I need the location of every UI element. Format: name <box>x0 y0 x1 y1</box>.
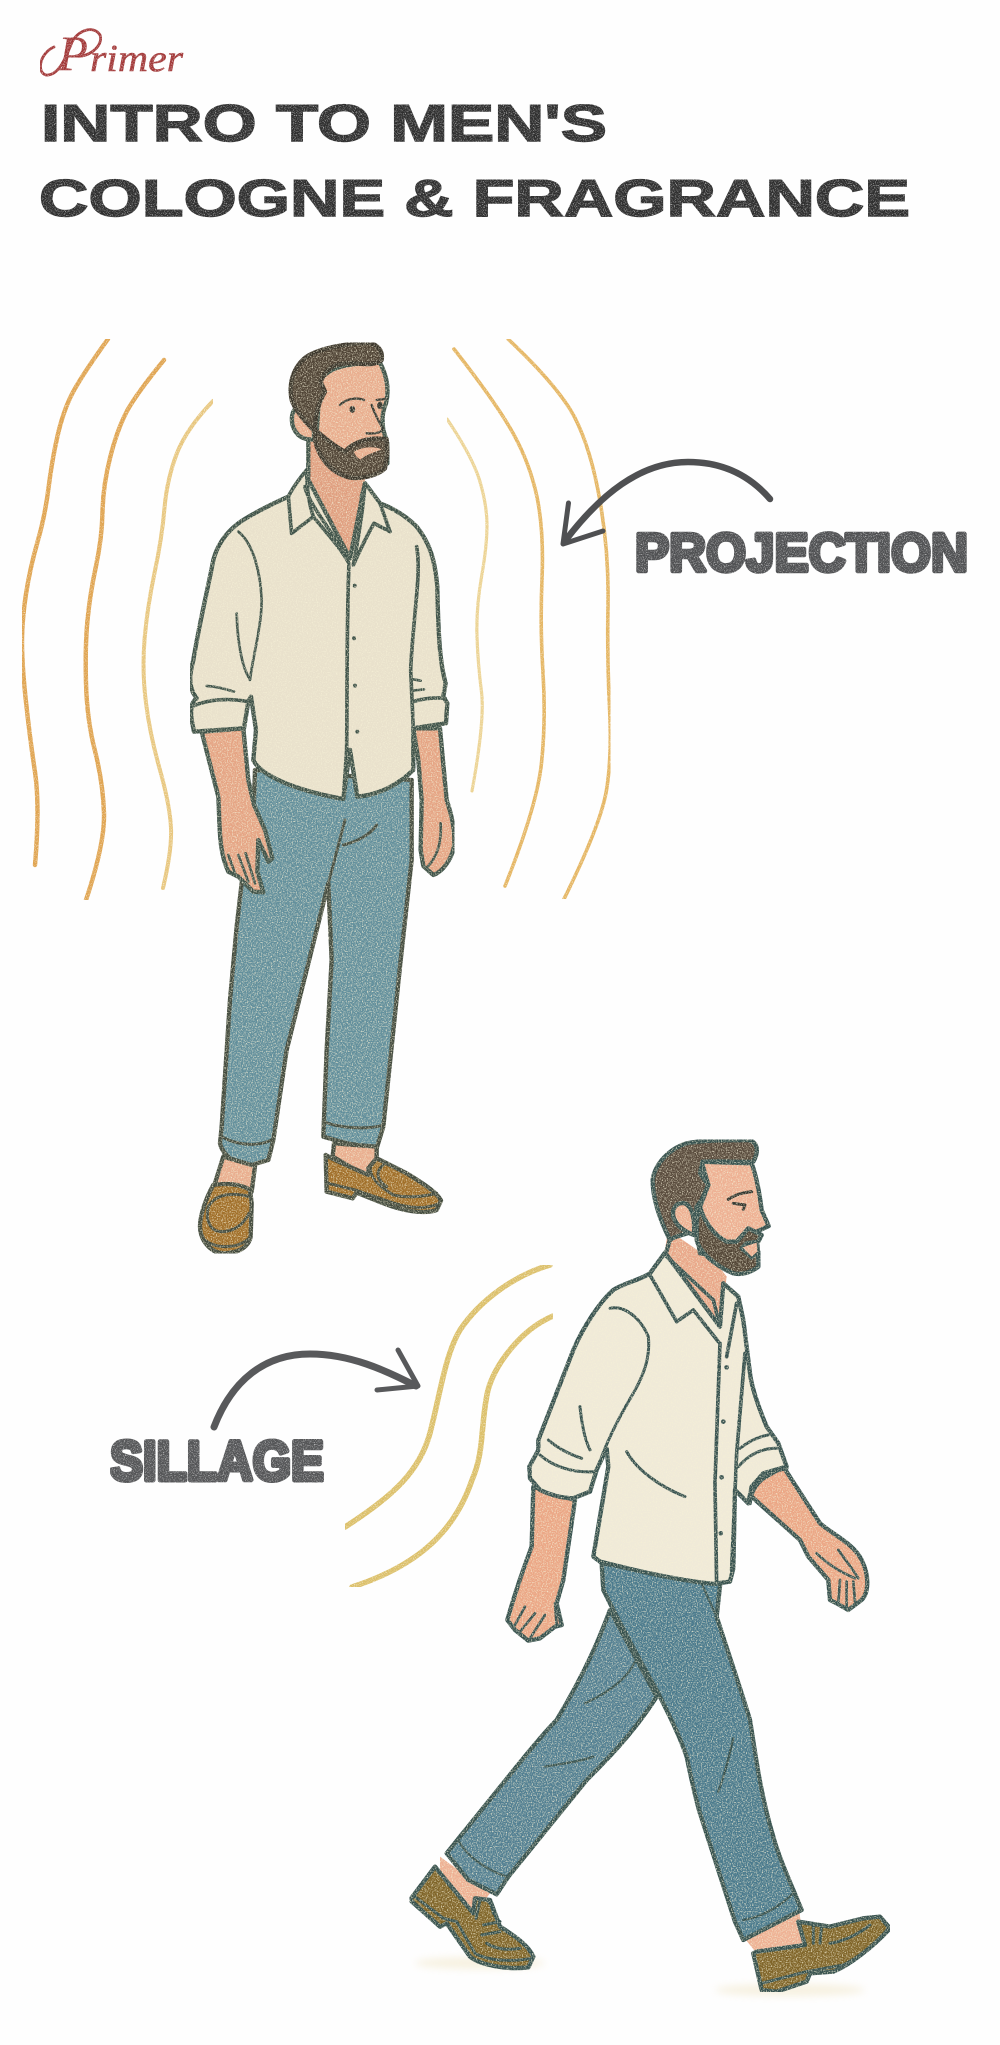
arrow: sillage <box>214 1350 418 1427</box>
foot: right <box>333 1143 377 1177</box>
foot: front <box>743 1907 805 1953</box>
shoe: right <box>326 1155 441 1212</box>
shirt <box>190 477 447 799</box>
shoe: left <box>200 1184 252 1253</box>
mouth <box>354 447 382 459</box>
lower body: legs and shoes <box>410 1487 890 1992</box>
logo: Primer <box>40 25 183 81</box>
neck <box>664 1230 727 1327</box>
face <box>695 1162 769 1260</box>
ear <box>292 407 314 440</box>
title: COLOGNE & FRAGRANCE <box>39 170 910 228</box>
mouth <box>743 1243 757 1257</box>
title <box>39 95 910 228</box>
title: INTRO TO MEN'S <box>41 95 607 153</box>
lower body: legs and shoes <box>200 728 454 1253</box>
back leg <box>447 1610 657 1894</box>
standing figure <box>190 343 454 1253</box>
arrow: projection <box>563 462 770 544</box>
hair <box>653 1140 757 1240</box>
jeans <box>220 770 412 1166</box>
label: projection: PROJECTION <box>635 523 968 583</box>
scent lines: sillage <box>345 1265 553 1587</box>
foot: left <box>213 1157 255 1192</box>
neck <box>307 437 365 558</box>
arm: back hand <box>507 1487 575 1641</box>
front leg <box>602 1563 802 1940</box>
logo: Primer: rimer <box>90 38 183 80</box>
logo: Primer: P <box>57 25 88 81</box>
facial features <box>340 399 387 433</box>
upper body: shirt and head <box>190 343 447 799</box>
label: sillage: SILLAGE <box>110 1429 324 1492</box>
shoe: back <box>410 1867 533 1968</box>
shoe: front <box>753 1917 890 1992</box>
face <box>317 363 388 477</box>
beard <box>315 430 387 478</box>
shirt details: collar, placket, seams, buttons <box>192 470 445 799</box>
shirt <box>529 1253 787 1584</box>
ground shadows <box>415 1957 865 1996</box>
arm: front with hand <box>743 1467 867 1610</box>
shirt details: collar, placket, seams, buttons <box>540 1255 787 1584</box>
walking figure <box>410 1140 890 1992</box>
ear <box>673 1203 694 1235</box>
facial features <box>728 1192 752 1209</box>
foot: back <box>440 1857 490 1913</box>
hair <box>291 343 382 430</box>
upper body: shirt and head <box>529 1140 867 1610</box>
arm: right with hand <box>413 728 454 875</box>
scent lines: projection left <box>22 339 213 900</box>
scent lines: projection right <box>447 339 610 899</box>
beard <box>697 1207 762 1274</box>
arm: left with hand <box>202 728 272 892</box>
